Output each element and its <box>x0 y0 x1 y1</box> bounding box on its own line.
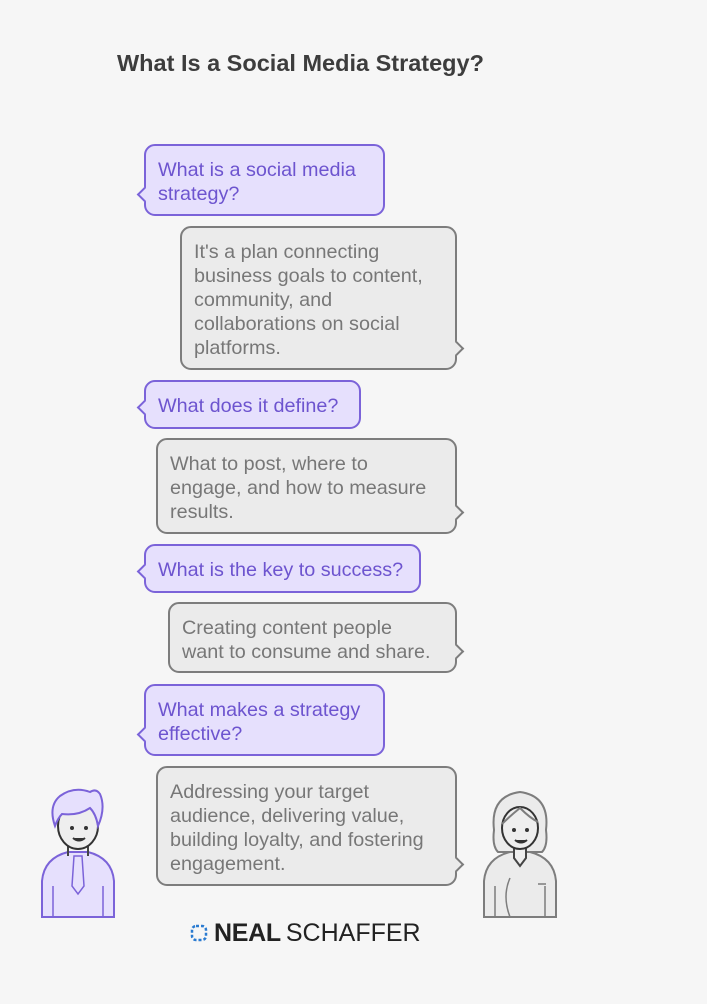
answer bubble 2: What to post, where to <box>170 453 368 475</box>
answer bubble 2: engage, and how to measure <box>170 477 426 499</box>
question bubble 3 <box>144 544 421 593</box>
question bubble 1: strategy? <box>158 183 239 205</box>
answer bubble 3 <box>168 602 457 673</box>
answer bubble 4 <box>156 766 457 886</box>
answer bubble 2 <box>156 438 457 534</box>
answer bubble 3: want to consume and share. <box>182 641 431 663</box>
question bubble 2: What does it define? <box>158 395 338 417</box>
logo <box>190 918 421 946</box>
question bubble 1: What is a social media <box>158 159 356 181</box>
answer bubble 1: community, and <box>194 289 332 311</box>
icon: man <box>41 788 115 918</box>
answer bubble 1: It's a plan connecting <box>194 241 379 263</box>
answer bubble 1: platforms. <box>194 337 281 359</box>
question bubble 3: What is the key to success? <box>158 559 403 581</box>
icon: woman <box>483 791 557 918</box>
question bubble 2 <box>144 380 361 429</box>
answer bubble 1: collaborations on social <box>194 313 400 335</box>
question bubble 4: What makes a strategy <box>158 699 360 721</box>
answer bubble 4: Addressing your target <box>170 781 369 803</box>
question bubble 4: effective? <box>158 723 242 745</box>
title: What Is a Social Media Strategy? <box>117 50 484 76</box>
answer bubble 4: building loyalty, and fostering <box>170 829 424 851</box>
icon: logo mark <box>190 924 208 942</box>
answer bubble 1 <box>180 226 457 370</box>
answer bubble 4: audience, delivering value, <box>170 805 404 827</box>
logo: SCHAFFER <box>286 918 421 946</box>
question bubble 1 <box>144 144 385 216</box>
answer bubble 2: results. <box>170 501 234 523</box>
answer bubble 3: Creating content people <box>182 617 392 639</box>
question bubble 4 <box>144 684 385 756</box>
logo: NEAL <box>214 918 281 946</box>
answer bubble 4: engagement. <box>170 853 285 875</box>
answer bubble 1: business goals to content, <box>194 265 423 287</box>
